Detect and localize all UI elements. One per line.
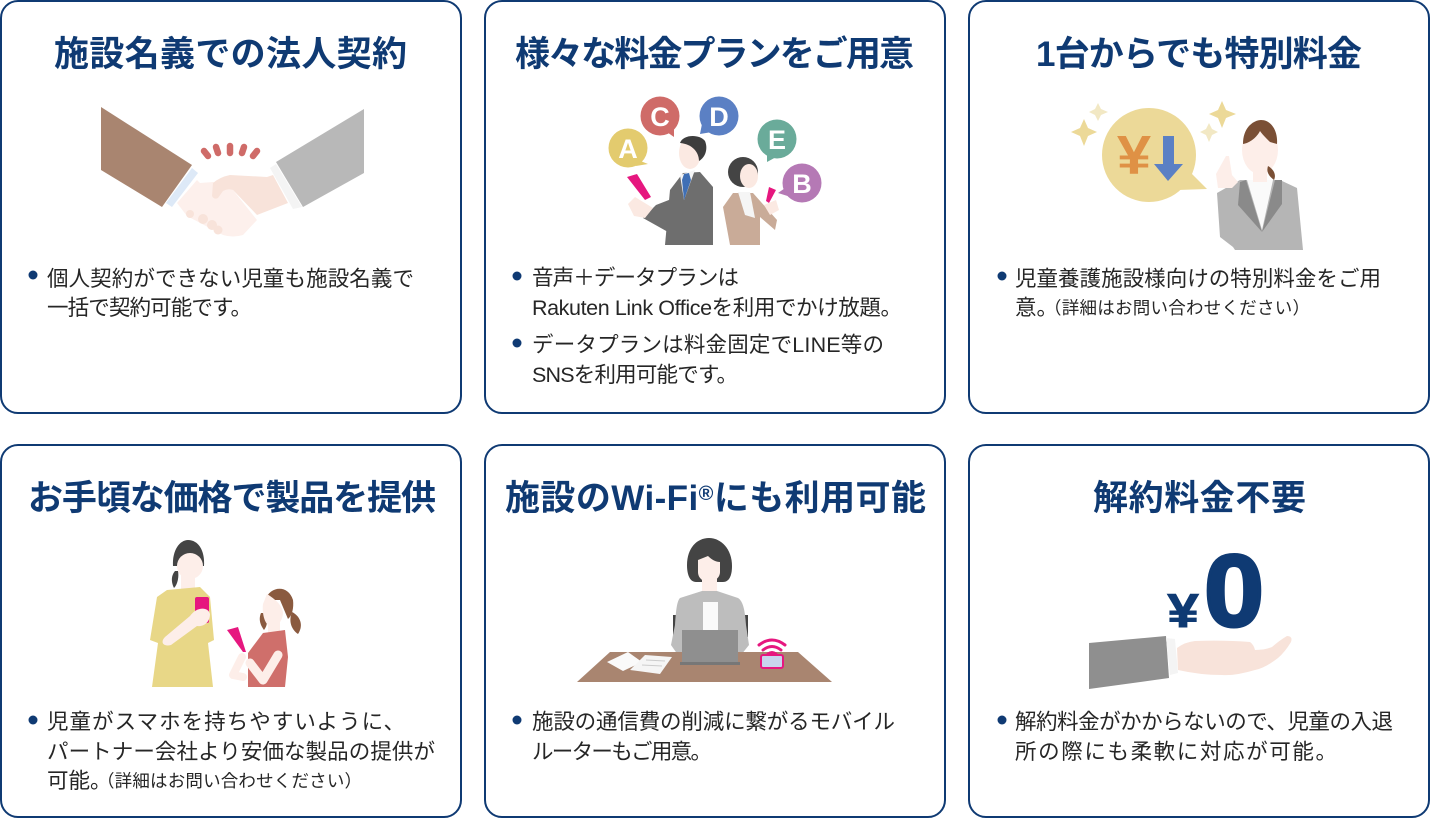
icon: woman with falling price bubble: ¥	[1117, 125, 1152, 186]
bullet text: facility Wi-Fi	[512, 710, 895, 764]
icon: people with plan bubbles: B	[792, 169, 812, 199]
bullet text: data plan	[512, 333, 884, 387]
bullet text: special rate: （詳細はお問い合わせください）	[1044, 298, 1310, 318]
icon: people with plan bubbles	[608, 96, 822, 245]
bullet text: corporate contract: 一括で契約可能です。	[47, 296, 252, 320]
bullet text: no cancellation fee	[998, 710, 1393, 764]
icon: hand with zero yen: ¥	[1167, 585, 1199, 638]
bullet text: voice plan: Rakuten Link Officeを利用でかけ放題。	[532, 296, 902, 320]
bullet text: no cancellation fee: 解約料金がかからないので、児童の入退	[1015, 710, 1393, 734]
heading: facility Wi-Fi: 施設のWi-Fi	[505, 479, 698, 518]
icon: woman with falling price bubble	[1071, 101, 1303, 250]
panel: corporate contract	[1, 1, 461, 413]
bullet text: voice plan: 音声＋データプランは	[532, 266, 739, 290]
icon: people with plan bubbles: D	[709, 102, 729, 132]
bullet text: special rate: 児童養護施設様向けの特別料金をご用	[1015, 267, 1381, 291]
panel: special rate	[969, 1, 1429, 413]
bullet text: facility Wi-Fi: 施設の通信費の削減に繋がるモバイル	[532, 710, 895, 734]
bullet text: affordable devices: 可能。	[47, 769, 112, 793]
bullet text: voice plan	[512, 266, 902, 320]
heading: corporate contract: 施設名義での法人契約	[54, 35, 407, 74]
icon: people with plan bubbles: A	[618, 134, 638, 164]
bullet text: affordable devices: パートナー会社より安価な製品の提供が	[47, 740, 435, 764]
bullet text: affordable devices	[28, 710, 435, 793]
icon: hand with zero yen	[1089, 535, 1292, 689]
panel: no cancellation fee	[969, 445, 1429, 817]
bullet text: corporate contract: 個人契約ができない児童も施設名義で	[47, 267, 414, 291]
panel: pricing plans	[485, 1, 945, 413]
bullet text: corporate contract	[28, 267, 414, 320]
heading: affordable devices: お手頃な価格で製品を提供	[28, 479, 436, 518]
heading: facility Wi-Fi: にも利用可能	[714, 479, 926, 518]
icon: hand with zero yen: 0	[1204, 535, 1264, 648]
icon: mother and child with phones	[150, 540, 301, 687]
bullet text: data plan: データプランは料金固定でLINE等の	[532, 333, 884, 357]
heading: no cancellation fee: 解約料金不要	[1093, 479, 1306, 518]
bullet text: facility Wi-Fi: ルーターもご用意。	[532, 740, 712, 764]
bullet text: affordable devices: 児童がスマホを持ちやすいように、	[47, 710, 405, 734]
heading: facility Wi-Fi: ®	[699, 483, 714, 505]
bullet text: special rate	[998, 267, 1381, 320]
heading: special rate: 1台からでも特別料金	[1036, 35, 1362, 74]
icon: woman at desk with mobile router	[577, 538, 832, 682]
panel: affordable devices	[1, 445, 461, 817]
icon: people with plan bubbles: C	[650, 102, 670, 132]
bullet text: data plan: SNSを利用可能です。	[532, 363, 738, 387]
icon: handshake	[101, 107, 364, 236]
heading: pricing plans: 様々な料金プランをご用意	[515, 35, 914, 74]
bullet text: no cancellation fee: 所の際にも柔軟に対応が可能。	[1015, 740, 1337, 764]
bullet text: special rate: 意。	[1015, 296, 1058, 320]
bullet text: affordable devices: （詳細はお問い合わせください）	[97, 771, 362, 791]
icon: people with plan bubbles: E	[768, 125, 786, 155]
panel: facility Wi-Fi	[485, 445, 945, 817]
